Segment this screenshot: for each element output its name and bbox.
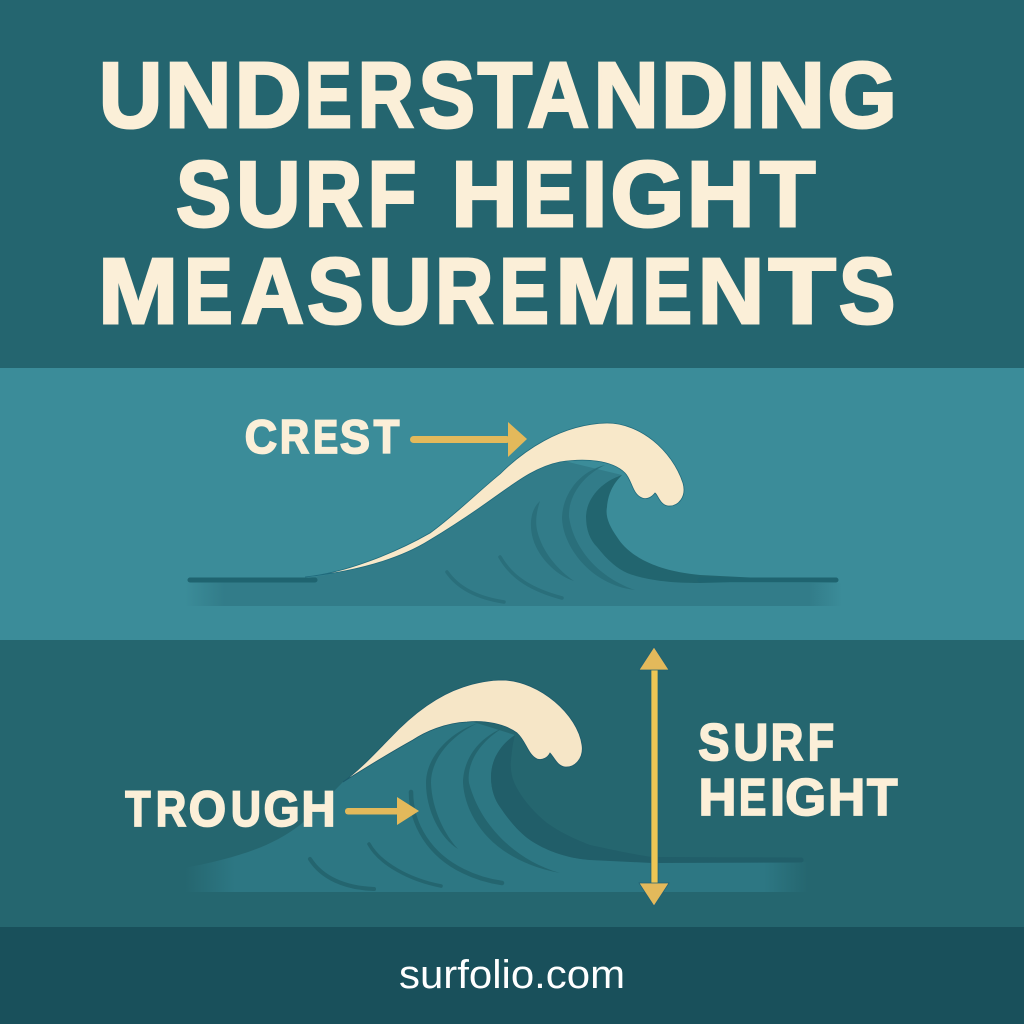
panel: title background: [0, 0, 1024, 368]
title: I: [582, 143, 607, 246]
title: U: [236, 143, 301, 246]
title: E: [523, 143, 575, 246]
title: M: [98, 240, 178, 343]
wave curl shadow: trough: [491, 735, 804, 863]
label: crest: [245, 410, 400, 463]
title: S: [176, 143, 231, 246]
title: F: [368, 143, 416, 246]
title: N: [594, 44, 659, 147]
arrow: crest: [410, 422, 527, 457]
label: crest: E: [313, 410, 338, 463]
title: A: [241, 240, 304, 343]
label: trough: H: [302, 781, 336, 837]
label: trough: G: [264, 781, 300, 837]
arrow: surf height: [639, 647, 669, 906]
label: crest: S: [340, 410, 370, 463]
title: N: [165, 44, 231, 147]
title: E: [184, 240, 233, 343]
wave body: crest: [185, 460, 842, 606]
title: E: [305, 44, 352, 147]
label: surf height: H: [699, 769, 736, 827]
title: R: [305, 143, 362, 246]
label: surf height: [698, 714, 898, 827]
title: D: [661, 44, 728, 147]
title: M: [555, 240, 638, 343]
title: E: [499, 240, 549, 343]
panel: crest: [0, 368, 1024, 640]
label: surf height: G: [785, 769, 826, 827]
title: [98, 44, 897, 343]
title: S: [307, 240, 364, 343]
wave body: trough: [185, 720, 808, 892]
title: N: [698, 240, 764, 343]
label: surf height: H: [828, 769, 865, 827]
label: trough: T: [125, 781, 151, 837]
wave foam: crest: [305, 423, 684, 577]
label: trough: O: [189, 781, 226, 837]
label: surf height: R: [771, 714, 803, 772]
title: U: [99, 44, 162, 147]
title: U: [368, 240, 432, 343]
label: trough: U: [231, 781, 261, 837]
title: S: [419, 44, 475, 147]
title: E: [643, 240, 692, 343]
title: G: [828, 44, 897, 147]
title: H: [451, 143, 518, 246]
label: surf height: T: [867, 769, 898, 827]
title: G: [611, 143, 684, 246]
title: I: [730, 44, 755, 147]
title: A: [527, 44, 589, 147]
title: H: [687, 143, 754, 246]
label: trough: [125, 781, 336, 837]
label: surf height: E: [739, 769, 766, 827]
wave streaks: trough: [310, 723, 560, 889]
title: R: [435, 240, 493, 343]
water line: crest: [190, 578, 836, 582]
title: T: [760, 143, 815, 246]
label: surf height: I: [770, 769, 785, 827]
title: R: [358, 44, 414, 147]
title: D: [235, 44, 302, 147]
label: crest: R: [280, 410, 309, 463]
label: surf height: U: [733, 714, 768, 772]
wave foam: trough: [343, 680, 582, 782]
footer url: surfolio.com: [399, 953, 625, 997]
wave curl shadow: crest: [586, 475, 760, 583]
title: T: [478, 44, 532, 147]
label: surf height: F: [808, 714, 834, 772]
panel: footer: [0, 927, 1024, 1024]
wave streaks: crest: [447, 465, 635, 602]
arrow: trough: [345, 797, 419, 825]
label: trough: R: [156, 781, 186, 837]
panel: trough and surf height: [0, 640, 1024, 927]
title: S: [839, 240, 895, 343]
label: crest: T: [374, 410, 400, 463]
label: surf height: S: [698, 714, 730, 772]
label: crest: C: [245, 410, 277, 463]
title: T: [769, 240, 836, 343]
title: N: [757, 44, 825, 147]
